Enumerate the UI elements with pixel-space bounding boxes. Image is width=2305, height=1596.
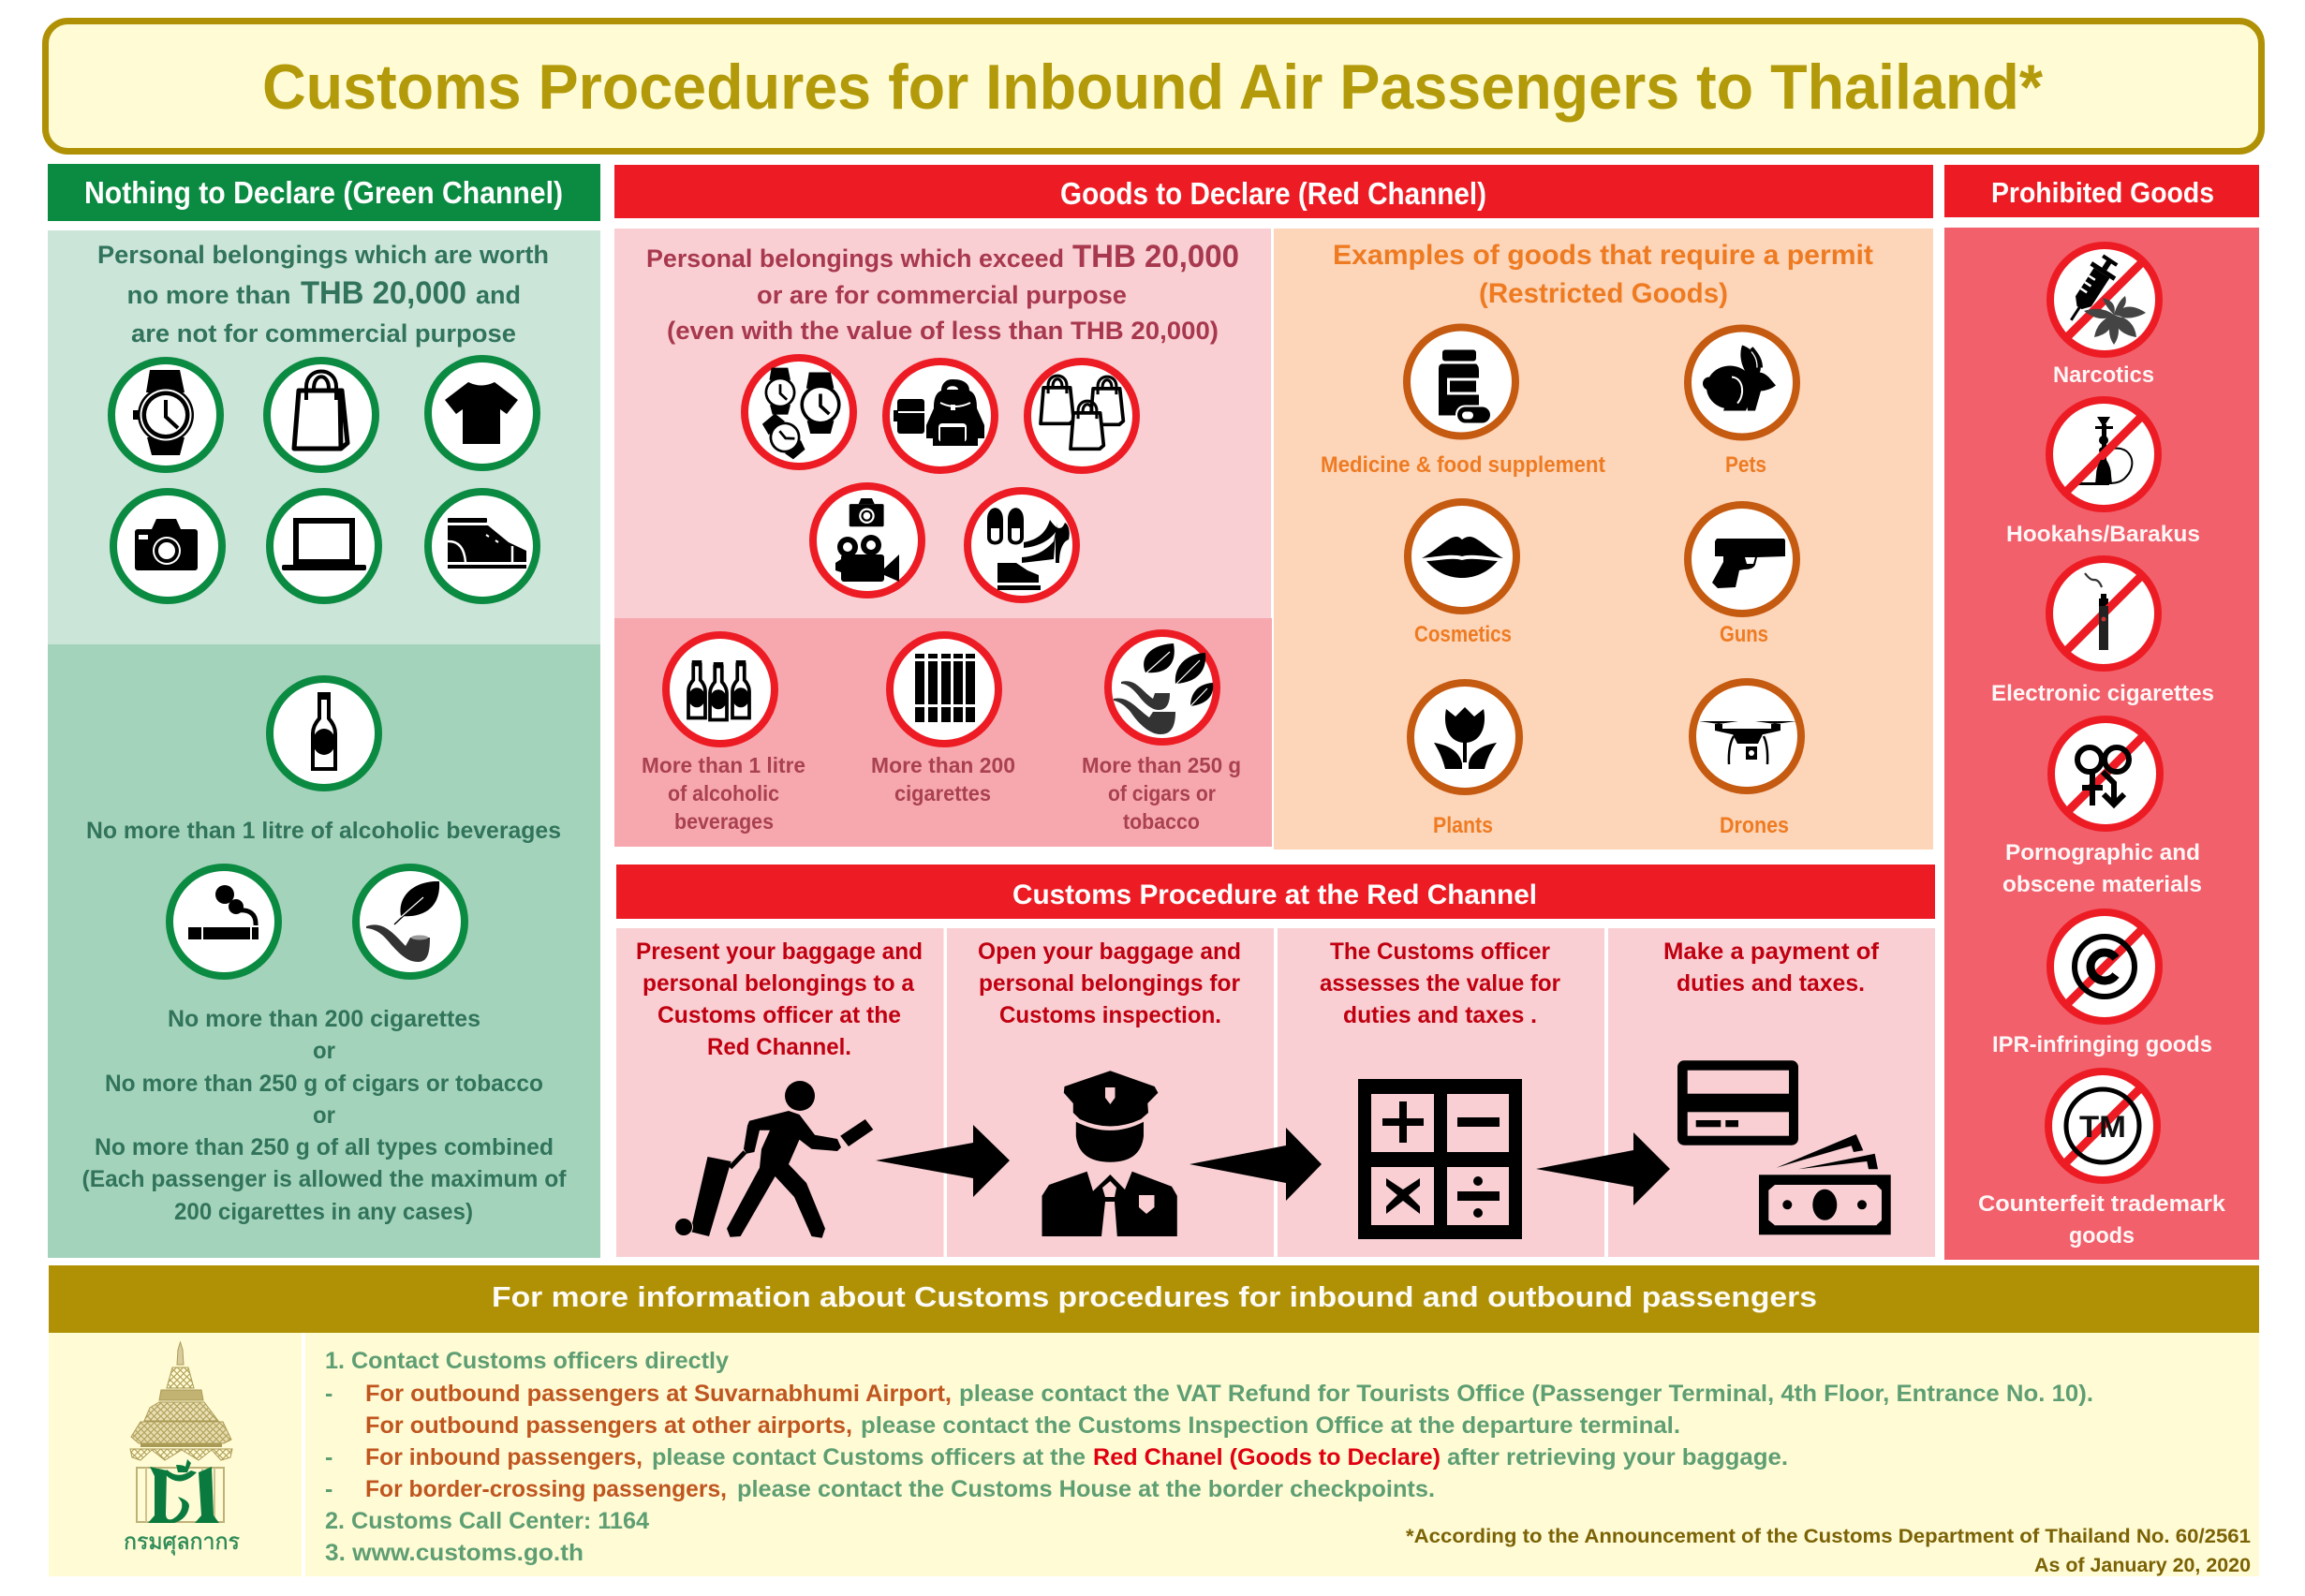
panel: green channel — [48, 164, 600, 1258]
step 2: open baggage — [947, 928, 1274, 1257]
icon: tulip — [1411, 683, 1519, 791]
icon: lips — [1408, 502, 1516, 611]
icon: drone — [1692, 682, 1801, 791]
panel: over-limit alcohol and tobacco: of alcoholic — [668, 781, 779, 805]
label: counterfeit trademark goods — [1978, 1191, 2226, 1249]
icon: no pornography — [2051, 719, 2160, 828]
panel: restricted goods — [1274, 229, 1933, 850]
icon: no copyright violations — [2050, 912, 2159, 1021]
panel: duty-free alcohol and tobacco: or — [313, 1038, 335, 1064]
text block: contact information: - — [325, 1444, 332, 1470]
panel: personal belongings allowance: and — [476, 281, 521, 309]
panel: personal belongings allowance: are not for commercial purpose — [131, 319, 516, 347]
panel: belongings over limit — [614, 229, 1271, 618]
icon: no narcotics — [2050, 245, 2159, 354]
panel: over-limit alcohol and tobacco: More than 1 litre — [642, 753, 805, 777]
panel: duty-free alcohol and tobacco: 200 cigarettes in any cases) — [174, 1199, 473, 1225]
text block: contact information: For outbound passengers at Suvarnabhumi Airport, — [365, 1381, 952, 1407]
panel: over-limit alcohol and tobacco — [614, 618, 1272, 847]
label: pornographic materials: obscene materials — [2002, 872, 2202, 897]
step 1: present baggage: personal belongings to a — [643, 970, 915, 997]
heading: prohibited goods: Prohibited Goods — [1991, 176, 2214, 209]
footnote: *According to the Announcement of the Customs Department of Thailand No. 60/2561 — [1406, 1526, 2251, 1547]
icon: customs officer — [1042, 1071, 1177, 1236]
icon: shopping bags — [1027, 362, 1136, 470]
text block: contact information: 1. Contact Customs officers directly — [325, 1348, 729, 1374]
panel: duty-free alcohol and tobacco: (Each passenger is allowed the maximum of — [82, 1166, 567, 1192]
heading: red channel: Goods to Declare (Red Channel) — [1060, 176, 1486, 211]
panel: duty-free alcohol and tobacco: No more than 250 g of all types combined — [95, 1134, 554, 1160]
panel: over-limit alcohol and tobacco: More than 250 g — [1082, 753, 1241, 777]
step 1: present baggage: Customs officer at the — [658, 1002, 901, 1028]
icon: pipe and leaf — [356, 867, 465, 976]
icon: cigarettes pack — [890, 635, 998, 744]
heading: more information — [49, 1265, 2259, 1333]
panel: duty-free alcohol and tobacco: No more than 250 g of cigars or tobacco — [105, 1071, 543, 1097]
panel: duty-free alcohol and tobacco: No more than 1 litre of alcoholic beverages — [86, 818, 561, 844]
panel: restricted goods: Examples of goods that require a permit — [1333, 240, 1873, 271]
footnote: As of January 20, 2020 — [2034, 1555, 2251, 1576]
heading: prohibited goods — [1944, 165, 2259, 217]
step 3: value assessment: assesses the value for — [1320, 970, 1560, 997]
icon: credit card and cash — [1677, 1060, 1891, 1234]
icon: no counterfeit trademark — [2048, 1071, 2157, 1180]
heading: customs procedure — [616, 864, 1935, 919]
panel: personal belongings allowance: Personal belongings which are worth — [97, 241, 549, 269]
panel: personal belongings allowance: no more than — [127, 281, 290, 309]
label: pornographic materials: Pornographic and — [2005, 840, 2200, 865]
text block: contact information: For outbound passengers at other airports, — [365, 1412, 852, 1439]
icon: camera — [113, 492, 222, 600]
label: counterfeit trademark goods: goods — [2069, 1223, 2135, 1249]
icon: bottle — [270, 679, 378, 788]
title banner — [45, 21, 2261, 152]
icon: medicine — [1407, 328, 1515, 436]
panel: restricted goods: Drones — [1720, 813, 1789, 838]
heading: green channel: Nothing to Declare (Green Channel) — [84, 175, 563, 210]
text block: contact information: - — [325, 1381, 332, 1407]
step 4: payment: Make a payment of — [1663, 938, 1880, 965]
icon: rabbit — [1688, 328, 1796, 436]
panel: belongings over limit: or are for commercial purpose — [757, 281, 1127, 309]
panel: belongings over limit: THB 20,000 — [1072, 239, 1239, 274]
panel: over-limit alcohol and tobacco: tobacco — [1123, 809, 1200, 834]
icon: gun — [1688, 505, 1796, 613]
heading: more information: For more information about Customs procedures for inbound and outbound passengers — [492, 1280, 1817, 1313]
label: electronic cigarettes: Electronic cigarettes — [1991, 681, 2214, 706]
icon: calculator — [1358, 1079, 1522, 1239]
step 1: present baggage: Present your baggage and — [636, 938, 923, 965]
step 3: value assessment: The Customs officer — [1330, 938, 1550, 965]
heading: customs procedure: Customs Procedure at the Red Channel — [1012, 879, 1537, 910]
text block: contact information: For inbound passengers, — [365, 1444, 643, 1470]
step 2: open baggage: Customs inspection. — [999, 1002, 1221, 1028]
heading: red channel — [614, 165, 1933, 218]
icon: watch — [111, 361, 220, 469]
heading: green channel — [48, 164, 600, 221]
panel: over-limit alcohol and tobacco: of cigars or — [1108, 781, 1216, 805]
icon: boot — [428, 492, 537, 600]
panel: restricted goods: Cosmetics — [1414, 622, 1512, 647]
step 1: present baggage: Red Channel. — [707, 1034, 851, 1060]
text block: contact information: please contact the Customs Inspection Office at the departure terminal. — [861, 1412, 1680, 1439]
icon: no hookah — [2049, 400, 2158, 509]
icon: shopping bag — [267, 361, 376, 469]
step 2: open baggage: Open your baggage and — [978, 938, 1241, 965]
icon: luggage and backpack — [886, 362, 995, 470]
step 3: value assessment: duties and taxes . — [1343, 1002, 1537, 1028]
icon: no counterfeit trademark: TM — [2079, 1110, 2126, 1144]
step 2: open baggage: personal belongings for — [979, 970, 1240, 997]
icon: camera and movie camera — [813, 486, 922, 595]
text block: contact information: 2. Customs Call Center: 1164 — [325, 1508, 649, 1534]
icon: shoes — [968, 491, 1076, 599]
panel: restricted goods: Plants — [1433, 813, 1493, 838]
panel: personal belongings allowance: THB 20,000 — [301, 275, 466, 311]
label: narcotics: Narcotics — [2053, 362, 2154, 388]
text block: contact information: 3. www.customs.go.th — [325, 1540, 584, 1566]
logo: customs department: กรมศุลกากร — [124, 1530, 240, 1556]
step 4: payment — [1608, 928, 1935, 1257]
text block: contact information: please contact the VAT Refund for Tourists Office (Passenger Terminal, 4th Floor, Entrance No. 10). — [959, 1381, 2093, 1407]
label: counterfeit trademark goods: Counterfeit trademark — [1978, 1191, 2226, 1217]
label: pornographic materials — [2002, 840, 2202, 897]
arrow: step 3 to 4 — [1536, 1132, 1670, 1205]
text block: contact information: please contact the Customs House at the border checkpoints. — [737, 1476, 1435, 1502]
panel: red channel — [614, 165, 1935, 1257]
panel: restricted goods: Medicine & food supplement — [1321, 452, 1605, 478]
step 4: payment: duties and taxes. — [1677, 970, 1865, 997]
arrow: step 1 to 2 — [876, 1125, 1010, 1197]
title banner: Customs Procedures for Inbound Air Passengers to Thailand* — [262, 52, 2044, 123]
text block: contact information: please contact Customs officers at the — [652, 1444, 1086, 1470]
panel: personal belongings allowance — [48, 230, 600, 644]
panel: over-limit alcohol and tobacco: beverages — [674, 809, 774, 834]
text block: contact information — [325, 1348, 2093, 1566]
panel: duty-free alcohol and tobacco: or — [313, 1102, 335, 1129]
icon: laptop — [270, 492, 378, 600]
label: hookahs: Hookahs/Barakus — [2006, 522, 2200, 547]
step 1: present baggage — [616, 928, 944, 1257]
panel: duty-free alcohol and tobacco: No more than 200 cigarettes — [168, 1006, 480, 1032]
arrow: step 2 to 3 — [1189, 1128, 1322, 1201]
text block: contact information: For border-crossing passengers, — [365, 1476, 727, 1502]
text block: contact information: after retrieving your baggage. — [1447, 1444, 1788, 1470]
panel: over-limit alcohol and tobacco: More than 200 — [871, 753, 1015, 777]
icon: no e-cigarette — [2049, 559, 2158, 668]
icon: pipes and leaves — [1108, 633, 1217, 742]
panel: belongings over limit: (even with the value of less than THB 20,000) — [667, 317, 1219, 345]
panel: more information — [49, 1265, 2259, 1576]
panel: prohibited goods — [1944, 165, 2259, 1260]
panel: restricted goods: Pets — [1725, 452, 1766, 478]
panel: over-limit alcohol and tobacco: cigarettes — [894, 781, 991, 805]
panel: customs procedure at the red channel — [616, 864, 1935, 1257]
panel: duty-free alcohol and tobacco — [48, 644, 600, 1258]
text block: contact information: Red Chanel (Goods to Declare) — [1093, 1444, 1441, 1470]
footnote — [1406, 1526, 2251, 1576]
label: IPR goods: IPR-infringing goods — [1992, 1032, 2212, 1057]
icon: walking passenger with suitcase — [674, 1081, 873, 1238]
panel: restricted goods: Guns — [1720, 622, 1768, 647]
logo: customs department — [124, 1342, 240, 1556]
panel: restricted goods: (Restricted Goods) — [1479, 278, 1728, 309]
icon: three bottles — [666, 635, 775, 744]
step 3: value assessment — [1278, 928, 1604, 1257]
panel: belongings over limit: Personal belongings which exceed — [646, 244, 1064, 273]
text block: contact information: - — [325, 1476, 332, 1502]
icon: watches — [745, 358, 853, 466]
icon: cigarette — [170, 867, 278, 976]
icon: t-shirt — [428, 359, 537, 467]
